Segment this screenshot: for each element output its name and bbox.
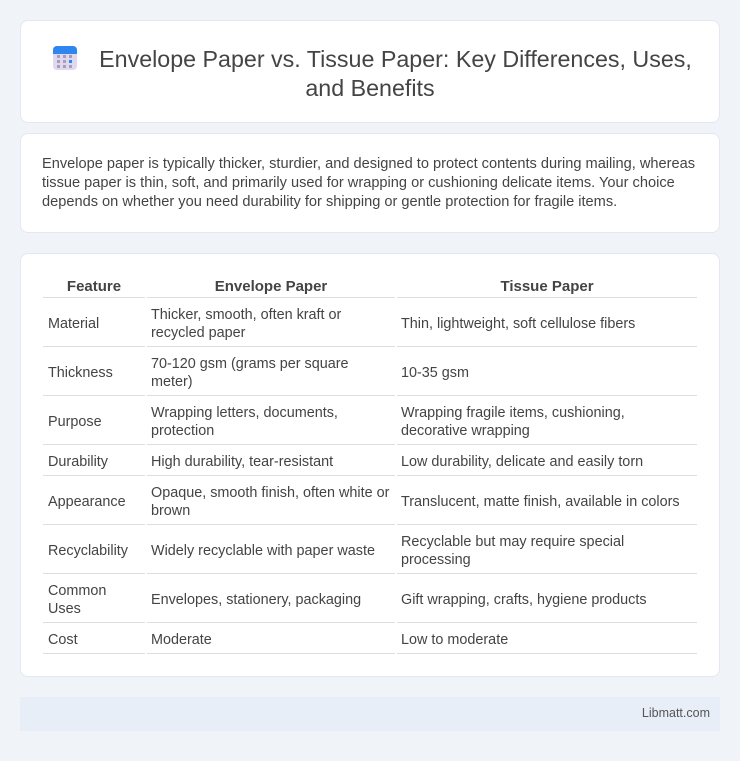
row: purpose: Wrapping fragile items, cushioning, bbox=[401, 405, 625, 421]
table content bbox=[43, 278, 697, 654]
row: common uses: Envelopes, stationery, packaging bbox=[151, 592, 361, 608]
title bbox=[99, 46, 692, 101]
intro text: Envelope paper is typically thicker, sturdier, and designed to protect contents during mailing, whereas bbox=[42, 156, 695, 172]
row: appearance: Translucent, matte finish, available in colors bbox=[401, 494, 680, 510]
row: cost: Moderate bbox=[151, 632, 212, 648]
row: cost: Cost bbox=[48, 632, 78, 648]
comparison table panel bbox=[20, 253, 720, 677]
row: material: recycled paper bbox=[151, 325, 245, 341]
table header: Envelope Paper bbox=[215, 278, 327, 295]
row: thickness: Thickness bbox=[48, 365, 113, 381]
row: recyclability: processing bbox=[401, 552, 471, 568]
row: common uses bbox=[48, 583, 647, 617]
table header: Tissue Paper bbox=[500, 278, 594, 295]
icon: calendar bbox=[53, 46, 77, 70]
row: durability: High durability, tear-resistant bbox=[151, 454, 333, 470]
row: purpose: decorative wrapping bbox=[401, 423, 530, 439]
row: cost: Low to moderate bbox=[401, 632, 508, 648]
row: purpose: protection bbox=[151, 423, 214, 439]
row: material: Material bbox=[48, 316, 99, 332]
row: recyclability: Recyclability bbox=[48, 543, 128, 559]
row: appearance: Opaque, smooth finish, often white or bbox=[151, 485, 389, 501]
row: durability: Low durability, delicate and easily torn bbox=[401, 454, 643, 470]
row: material: Thicker, smooth, often kraft or bbox=[151, 307, 341, 323]
intro text bbox=[42, 156, 695, 210]
row: purpose bbox=[48, 405, 625, 439]
row: durability: Durability bbox=[48, 454, 108, 470]
row: thickness: 10-35 gsm bbox=[401, 365, 469, 381]
row: common uses: Common bbox=[48, 583, 106, 599]
title: and Benefits bbox=[305, 75, 435, 101]
row: recyclability: Widely recyclable with paper waste bbox=[151, 543, 375, 559]
row: thickness bbox=[48, 356, 469, 390]
row: material: Thin, lightweight, soft cellulose fibers bbox=[401, 316, 635, 332]
row: appearance: Appearance bbox=[48, 494, 126, 510]
header panel bbox=[20, 20, 720, 123]
footer credit: Libmatt.com bbox=[642, 706, 710, 720]
row: common uses: Gift wrapping, crafts, hygiene products bbox=[401, 592, 647, 608]
row: appearance: brown bbox=[151, 503, 190, 519]
row: purpose: Wrapping letters, documents, bbox=[151, 405, 338, 421]
row: thickness: meter) bbox=[151, 374, 193, 390]
intro panel bbox=[20, 133, 720, 233]
row: purpose: Purpose bbox=[48, 414, 102, 430]
row: cost bbox=[48, 632, 508, 648]
footer bar bbox=[20, 697, 720, 731]
row: material bbox=[48, 307, 635, 341]
intro text: tissue paper is thin, soft, and primarily used for wrapping or cushioning delicate items. Your choice bbox=[42, 175, 675, 191]
row: recyclability: Recyclable but may require special bbox=[401, 534, 624, 550]
row: durability bbox=[48, 454, 643, 470]
intro text: depends on whether you need durability for shipping or gentle protection for fragile items. bbox=[42, 194, 617, 210]
table header bbox=[67, 278, 594, 295]
row: common uses: Uses bbox=[48, 601, 81, 617]
title: Envelope Paper vs. Tissue Paper: Key Differences, Uses, bbox=[99, 46, 692, 72]
row: appearance bbox=[48, 485, 680, 519]
row: thickness: 70-120 gsm (grams per square bbox=[151, 356, 349, 372]
row: recyclability bbox=[48, 534, 624, 568]
table header: Feature bbox=[67, 278, 121, 295]
